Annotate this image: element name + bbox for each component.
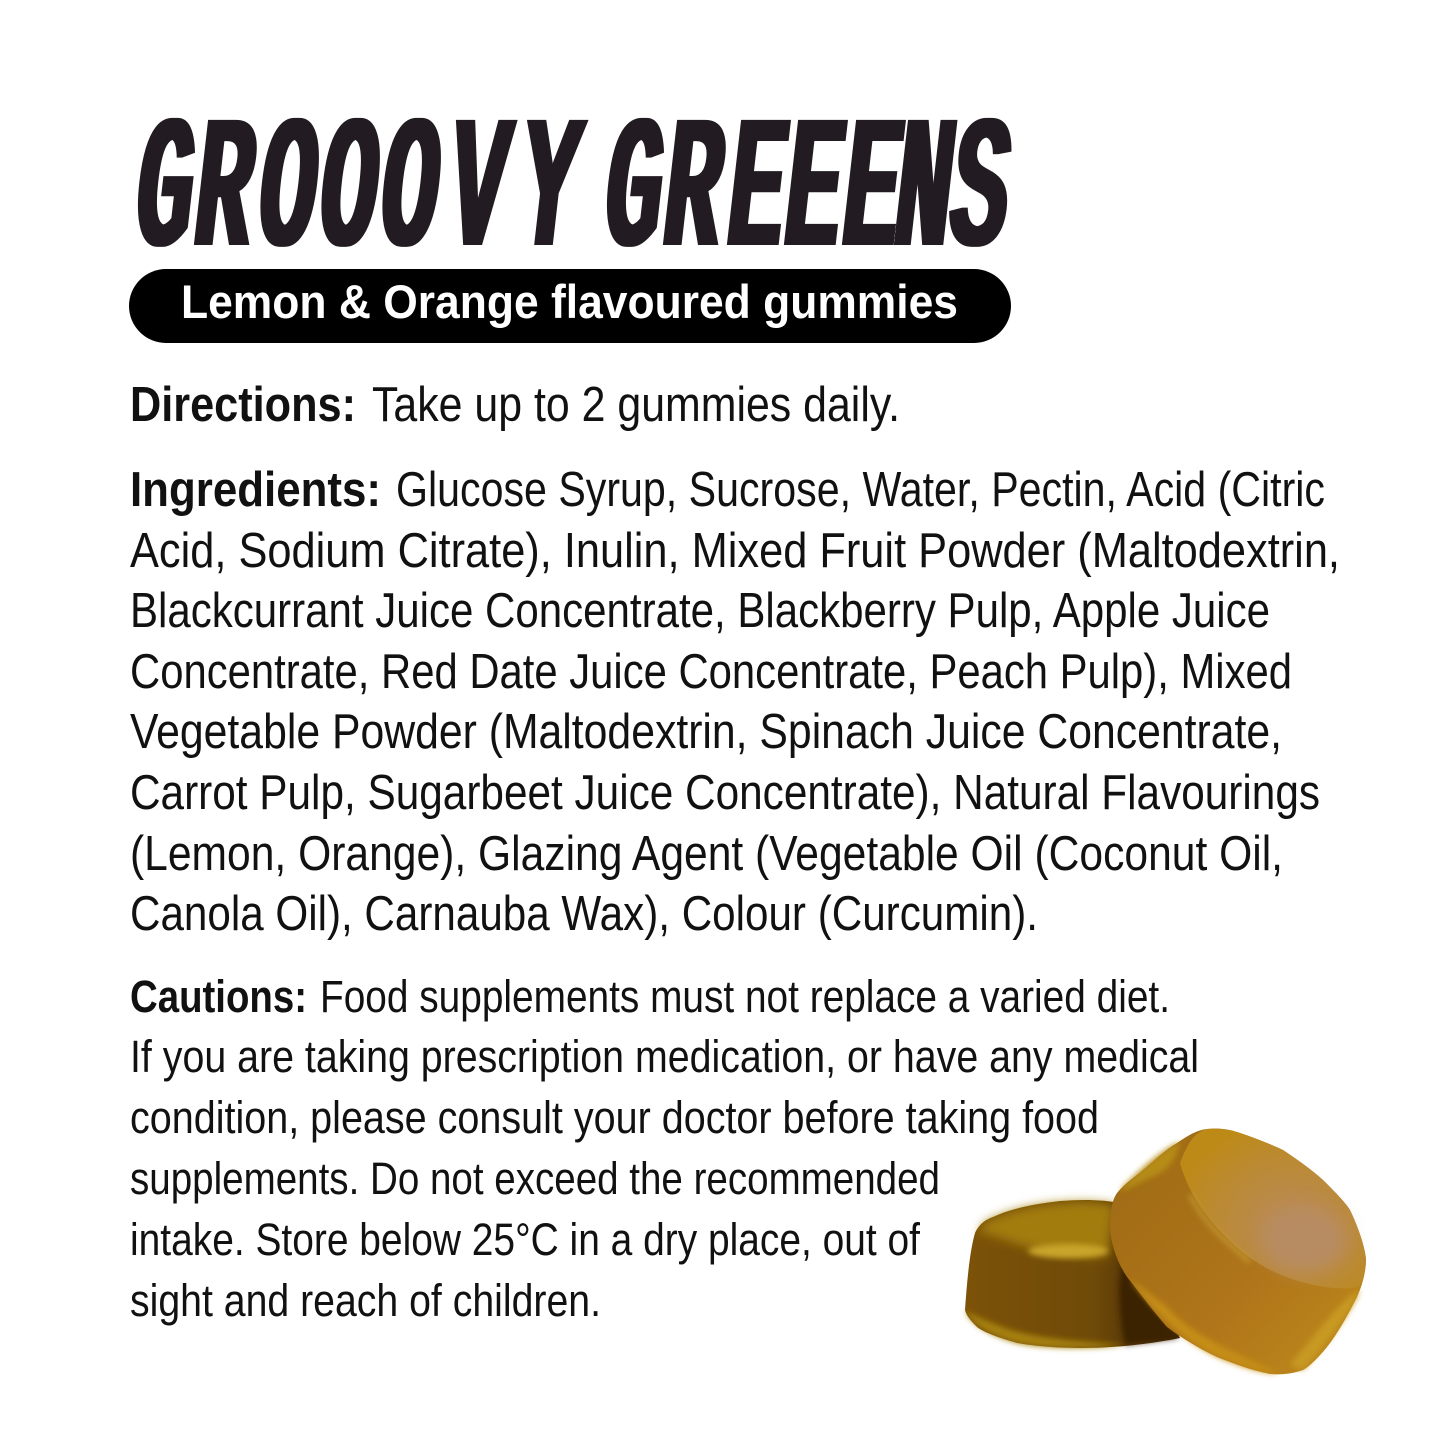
directions text bbox=[130, 378, 900, 432]
ingredients text: Blackcurrant Juice Concentrate, Blackberry Pulp, Apple Juice bbox=[130, 584, 1270, 638]
left gummy bbox=[965, 1200, 1180, 1348]
right gummy bbox=[1110, 1129, 1366, 1374]
cautions text: Cautions: bbox=[130, 971, 307, 1022]
cautions text: supplements. Do not exceed the recommended bbox=[130, 1153, 940, 1204]
cautions text: If you are taking prescription medication, or have any medical bbox=[130, 1031, 1199, 1082]
cautions text: condition, please consult your doctor before taking food bbox=[130, 1092, 1099, 1143]
ingredients text: Ingredients: bbox=[130, 463, 381, 517]
ingredients text: (Lemon, Orange), Glazing Agent (Vegetable Oil (Coconut Oil, bbox=[130, 827, 1283, 881]
image: two gummies bbox=[965, 1129, 1366, 1374]
cautions text: intake. Store below 25°C in a dry place, out of bbox=[130, 1214, 920, 1265]
ingredients text: Vegetable Powder (Maltodextrin, Spinach Juice Concentrate, bbox=[130, 705, 1282, 759]
ingredients text: Canola Oil), Carnauba Wax), Colour (Curcumin). bbox=[130, 887, 1038, 941]
cautions text: Food supplements must not replace a varied diet. bbox=[320, 971, 1170, 1022]
cautions text bbox=[130, 971, 1199, 1326]
subtitle pill bbox=[129, 269, 1011, 343]
directions text: Directions: bbox=[130, 378, 356, 432]
ingredients text bbox=[130, 463, 1340, 941]
subtitle pill: Lemon & Orange flavoured gummies bbox=[181, 275, 958, 328]
directions text: Take up to 2 gummies daily. bbox=[372, 378, 900, 432]
cautions text: sight and reach of children. bbox=[130, 1275, 601, 1326]
title: GROOOVY GREEENS bbox=[124, 88, 1021, 303]
